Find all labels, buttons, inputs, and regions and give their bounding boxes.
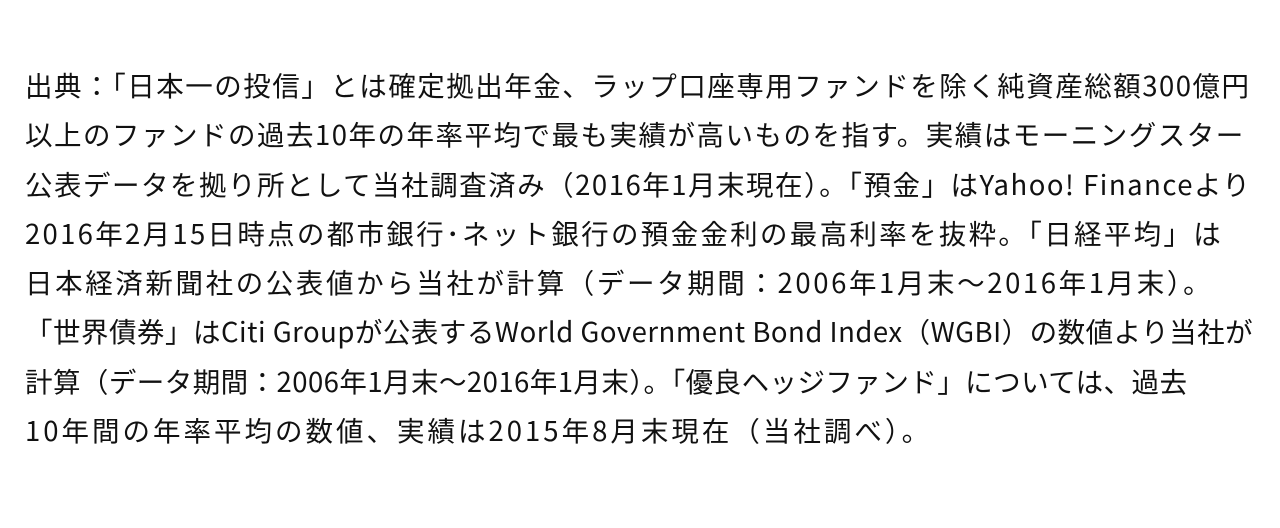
text block: source notes: 出典：「日本一の投信」とは確定拠出年金、ラップ口座専用ファンドを除く純資産総額300億円: [25, 64, 1251, 104]
text block: source notes: 以上のファンドの過去10年の年率平均で最も実績が高いものを指す。実績はモーニングスター: [25, 113, 1245, 153]
text block: source notes: 10年間の年率平均の数値、実績は2015年8月末現在（当社調べ）。: [25, 409, 932, 449]
text block: source notes: 日本経済新聞社の公表値から当社が計算（データ期間：2006年1月末～2016年1月末）。: [25, 261, 1213, 301]
text block: source notes: 公表データを拠り所として当社調査済み（2016年1月末現在）。「預金」はYahoo! Financeより: [25, 163, 1251, 203]
text block: source notes: 「世界債券」はCiti Groupが公表するWorld Government Bond Index（WGBI）の数値より当社が: [25, 310, 1253, 350]
text block: source notes: [25, 64, 1253, 449]
text block: source notes: 計算（データ期間：2006年1月末～2016年1月末）。「優良ヘッジファンド」については、過去: [25, 360, 1187, 400]
text block: source notes: 2016年2月15日時点の都市銀行･ネット銀行の預金金利の最高利率を抜粋。「日経平均」は: [25, 212, 1223, 252]
